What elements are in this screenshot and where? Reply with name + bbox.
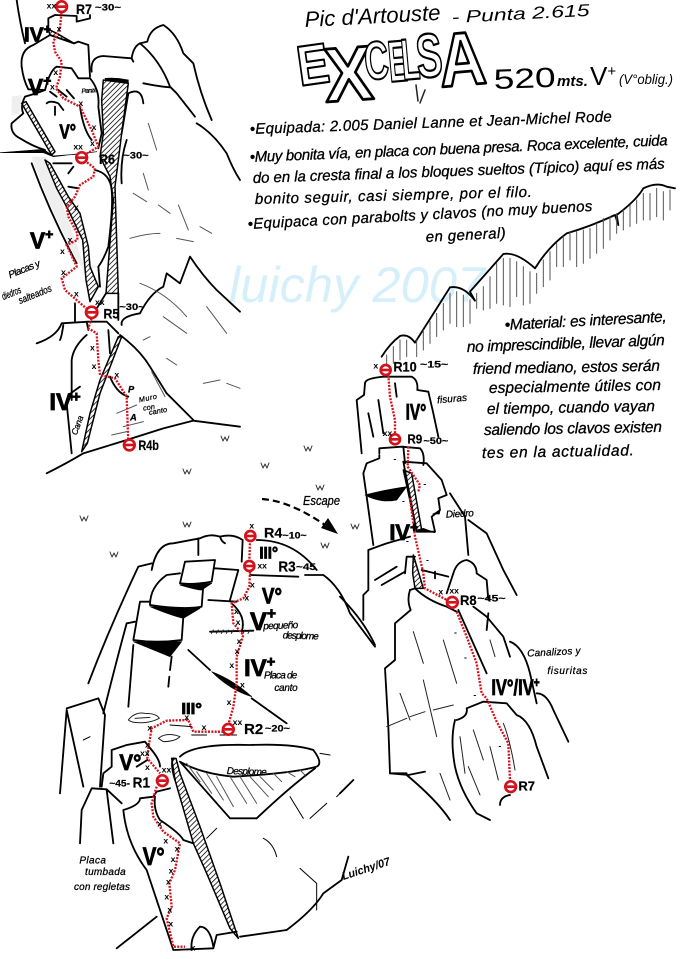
bolt marks: x <box>68 235 73 245</box>
bolt marks: x <box>90 343 95 353</box>
length: 520 <box>493 62 556 95</box>
bolt marks: x <box>166 877 171 887</box>
bolt marks: x <box>168 919 173 929</box>
bolt marks: x <box>250 580 255 590</box>
grades: + <box>44 22 51 37</box>
bolt marks: xx <box>257 560 267 570</box>
material line 3: friend mediano, estos serán <box>473 358 660 378</box>
route notes: tumbada <box>85 867 126 878</box>
belay R5 <box>86 307 97 318</box>
grades: IV <box>49 389 72 416</box>
grades: V° <box>59 120 76 143</box>
grades: + <box>43 73 51 89</box>
bolt marks: x <box>61 267 66 277</box>
bolt marks: x <box>438 586 443 596</box>
route name EXCELSA: E <box>385 28 410 95</box>
grades: V <box>30 227 45 253</box>
bolt marks: x <box>147 723 152 733</box>
route notes: Panza <box>81 87 98 95</box>
grades: + <box>267 655 276 671</box>
route name EXCELSA: S <box>413 20 445 91</box>
grades: V° <box>119 750 141 775</box>
route notes: con <box>142 402 155 413</box>
material line 6: saliendo los clavos existen <box>484 419 662 439</box>
grass tufts <box>80 436 359 557</box>
belay R2 <box>223 724 234 735</box>
belay R1 <box>157 775 168 786</box>
text block: material notes <box>467 309 667 462</box>
bolt marks: xx <box>449 585 459 595</box>
belay labels <box>109 524 316 791</box>
route notes: Diedro <box>446 508 475 521</box>
route name EXCELSA: X <box>321 29 376 118</box>
bolt marks: x <box>60 246 65 256</box>
bolt marks: - <box>393 454 396 464</box>
bolt marks: x <box>234 606 239 616</box>
overall grade: + <box>607 63 616 80</box>
grades: V° <box>143 843 165 871</box>
grades <box>119 543 282 871</box>
belay R4b <box>124 440 135 450</box>
material line 7: tes en la actualidad. <box>482 442 634 462</box>
belay labels: R4 <box>264 524 283 540</box>
grades: V° <box>262 583 282 608</box>
bolt marks: x <box>114 370 119 380</box>
watermark: luichy 2007 <box>229 257 487 313</box>
grades: + <box>410 520 418 535</box>
accent mark <box>416 85 425 103</box>
grades <box>24 22 81 416</box>
bolt marks: - <box>423 479 426 489</box>
belay labels: R8 <box>460 592 477 608</box>
bolt marks: x <box>145 739 150 749</box>
grades: III° <box>259 543 278 562</box>
route notes: diedros <box>0 285 23 303</box>
route notes: Placas y <box>7 258 43 281</box>
grades: III° <box>181 701 202 718</box>
belay labels: ~30~ <box>95 3 122 13</box>
bolt marks: x <box>90 138 95 148</box>
obligatory grade: (V°oblig.) <box>619 71 673 87</box>
bolt marks: - <box>498 740 501 750</box>
belay labels <box>393 358 535 794</box>
bolt marks: x <box>74 289 79 299</box>
route notes <box>437 393 587 677</box>
units: mts. <box>557 73 588 90</box>
route name EXCELSA: C <box>362 29 391 92</box>
route notes: P <box>128 385 135 395</box>
belay labels: ~30~ <box>119 302 145 312</box>
route line <box>388 375 510 780</box>
bolt marks: x <box>169 865 174 875</box>
belay R9 <box>390 434 400 444</box>
route notes: A <box>129 413 137 423</box>
grades: IV <box>24 24 44 47</box>
bolt marks: x <box>373 360 378 370</box>
bolt marks <box>47 0 119 380</box>
bolt marks: x <box>249 520 254 530</box>
bolt marks: x <box>74 202 79 212</box>
route notes: desplome <box>283 630 319 643</box>
summit name and altitude: - Punta 2.615 <box>451 1 591 27</box>
route name EXCELSA <box>293 14 489 118</box>
belay R3 <box>244 561 254 571</box>
belay labels: ~15~ <box>420 359 449 369</box>
belay R6 <box>76 152 87 163</box>
bolt marks: xx <box>95 297 105 307</box>
bolt marks: xx <box>73 141 83 151</box>
route notes: salteados <box>17 283 54 307</box>
bolt marks: - <box>473 689 476 699</box>
arrow: escape <box>262 493 340 534</box>
route notes: Muro <box>138 392 158 404</box>
belay R8 <box>447 597 458 608</box>
bolt marks: x <box>227 697 232 707</box>
route notes: fisuritas <box>547 666 587 677</box>
panel: lower left topo, start to R4 <box>60 520 392 953</box>
icon: bush <box>128 713 180 742</box>
bolt marks: x <box>53 67 58 77</box>
location title: Pic d'Artouste <box>304 0 441 32</box>
grades <box>389 399 540 700</box>
route notes: Placa de <box>264 670 298 681</box>
route notes: Placa <box>79 855 106 866</box>
bolt marks: - <box>454 627 457 637</box>
bolt marks: - <box>402 495 405 505</box>
bolt marks: x <box>78 98 83 108</box>
escape label: Escape <box>303 493 340 508</box>
bolt marks: xx <box>140 748 150 758</box>
belay labels: R7 <box>518 779 535 794</box>
route notes: pequeño <box>262 620 299 632</box>
belay labels: R7 <box>76 1 92 17</box>
belay R10 <box>381 365 391 375</box>
grades: + <box>534 675 540 690</box>
bolt marks: x <box>229 660 234 670</box>
grades: + <box>267 606 276 623</box>
bolt marks <box>373 360 501 750</box>
belay R7 <box>56 1 67 12</box>
route name EXCELSA: L <box>398 26 422 93</box>
equipment line 2: en general) <box>425 225 506 246</box>
bolt marks: - <box>426 555 429 565</box>
grades: V <box>250 608 267 636</box>
route notes: con regletas <box>74 882 130 893</box>
bolt marks: - <box>464 652 467 662</box>
bolt marks: x <box>191 943 196 953</box>
overall grade: V <box>590 61 607 91</box>
bolt marks: x <box>157 819 162 829</box>
route line <box>147 540 250 947</box>
belay labels: R10 <box>393 358 417 374</box>
header: titles <box>293 0 673 118</box>
belay labels: R3 <box>278 560 296 576</box>
route notes: Desplome <box>227 766 267 778</box>
route notes: Cana <box>69 414 85 436</box>
belay labels: ~45~ <box>477 594 506 604</box>
panel: upper route topo, R4b to R7 <box>0 0 240 473</box>
mountain ridge <box>382 185 675 367</box>
belay labels: R6 <box>99 151 115 167</box>
belay labels: ~10~ <box>283 530 307 540</box>
bolt marks: x <box>240 680 245 690</box>
route notes <box>0 87 168 436</box>
bolt marks: x <box>175 843 180 853</box>
belay labels: ~50~ <box>423 436 449 446</box>
bolt marks: x <box>171 854 176 864</box>
description line 2: do en la cresta final a los bloques sueltos (Típico) aquí es más <box>253 156 665 187</box>
bolt marks: x <box>235 646 240 656</box>
bolt marks: x <box>237 636 242 646</box>
bolt marks: xx <box>233 717 242 727</box>
bolt marks: xx <box>47 0 56 10</box>
material line 1: •Material: es interesante, <box>504 309 667 334</box>
grades: IV <box>389 520 410 545</box>
belay labels: ~45 <box>296 562 316 572</box>
description line 1: •Muy bonita vía, en placa con buena presa. Roca excelente, cuida <box>249 132 668 166</box>
material line 5: el tiempo, cuando vayan <box>487 398 655 418</box>
signature: Luichy/07 <box>341 856 392 883</box>
belay labels: R1 <box>133 775 150 791</box>
route notes: canto <box>274 683 298 694</box>
bolt marks: x <box>164 891 169 901</box>
route name EXCELSA: A <box>435 14 489 103</box>
bolt marks: - <box>406 535 409 545</box>
bolt marks: x <box>202 722 207 732</box>
grades: IV <box>244 655 267 682</box>
grades: + <box>72 389 81 405</box>
grades: + <box>45 226 53 242</box>
bolt marks: x <box>163 835 168 845</box>
route notes: canto <box>148 405 168 417</box>
bolt marks: x <box>236 617 241 627</box>
route notes: Canalizos y <box>527 646 582 660</box>
description line 3: bonito seguir, casi siempre, por el filo. <box>255 184 532 208</box>
text block: route description <box>247 108 668 246</box>
panel: right topo, R7 to R10 <box>340 358 587 820</box>
belay labels <box>76 1 159 453</box>
bolt marks: x <box>92 361 97 371</box>
bolt marks: x <box>244 593 249 603</box>
bolt marks: x <box>184 712 189 722</box>
belay labels: ~20~ <box>265 724 291 734</box>
grades: IV° <box>406 399 426 424</box>
material line 4: especialmente útiles con <box>489 377 661 397</box>
bolt marks: xx <box>383 428 392 438</box>
belay R7 <box>505 781 516 792</box>
material line 2: no imprescindible, llevar algún <box>467 332 665 356</box>
grades: IV°/IV <box>491 675 548 700</box>
belay R4 <box>245 531 255 541</box>
belay labels: ~45- <box>109 779 130 789</box>
bolt marks: x <box>92 122 97 132</box>
equipment line 1: •Equipaca con parabolts y clavos (no muy buenos <box>247 198 593 233</box>
belay labels: R9 <box>407 431 422 446</box>
route line <box>53 10 128 443</box>
bolt marks: xx <box>162 765 171 775</box>
grades: V <box>28 74 43 100</box>
bolt marks: x <box>167 904 172 914</box>
belay labels: R4b <box>138 437 159 453</box>
belay labels: ~30~ <box>123 150 149 160</box>
route name EXCELSA: E <box>293 32 333 99</box>
belay labels: R5 <box>103 305 120 321</box>
bolt marks: x <box>57 24 62 34</box>
equipped: •Equipada: 2.005 Daniel Lanne et Jean-Michel Rode <box>250 108 612 138</box>
bolt marks: x <box>50 81 55 91</box>
route notes <box>74 620 319 893</box>
bolt marks <box>140 520 267 953</box>
route notes: fisuras <box>437 393 467 406</box>
bolt marks: x <box>145 762 150 772</box>
belay labels: R2 <box>244 722 263 738</box>
